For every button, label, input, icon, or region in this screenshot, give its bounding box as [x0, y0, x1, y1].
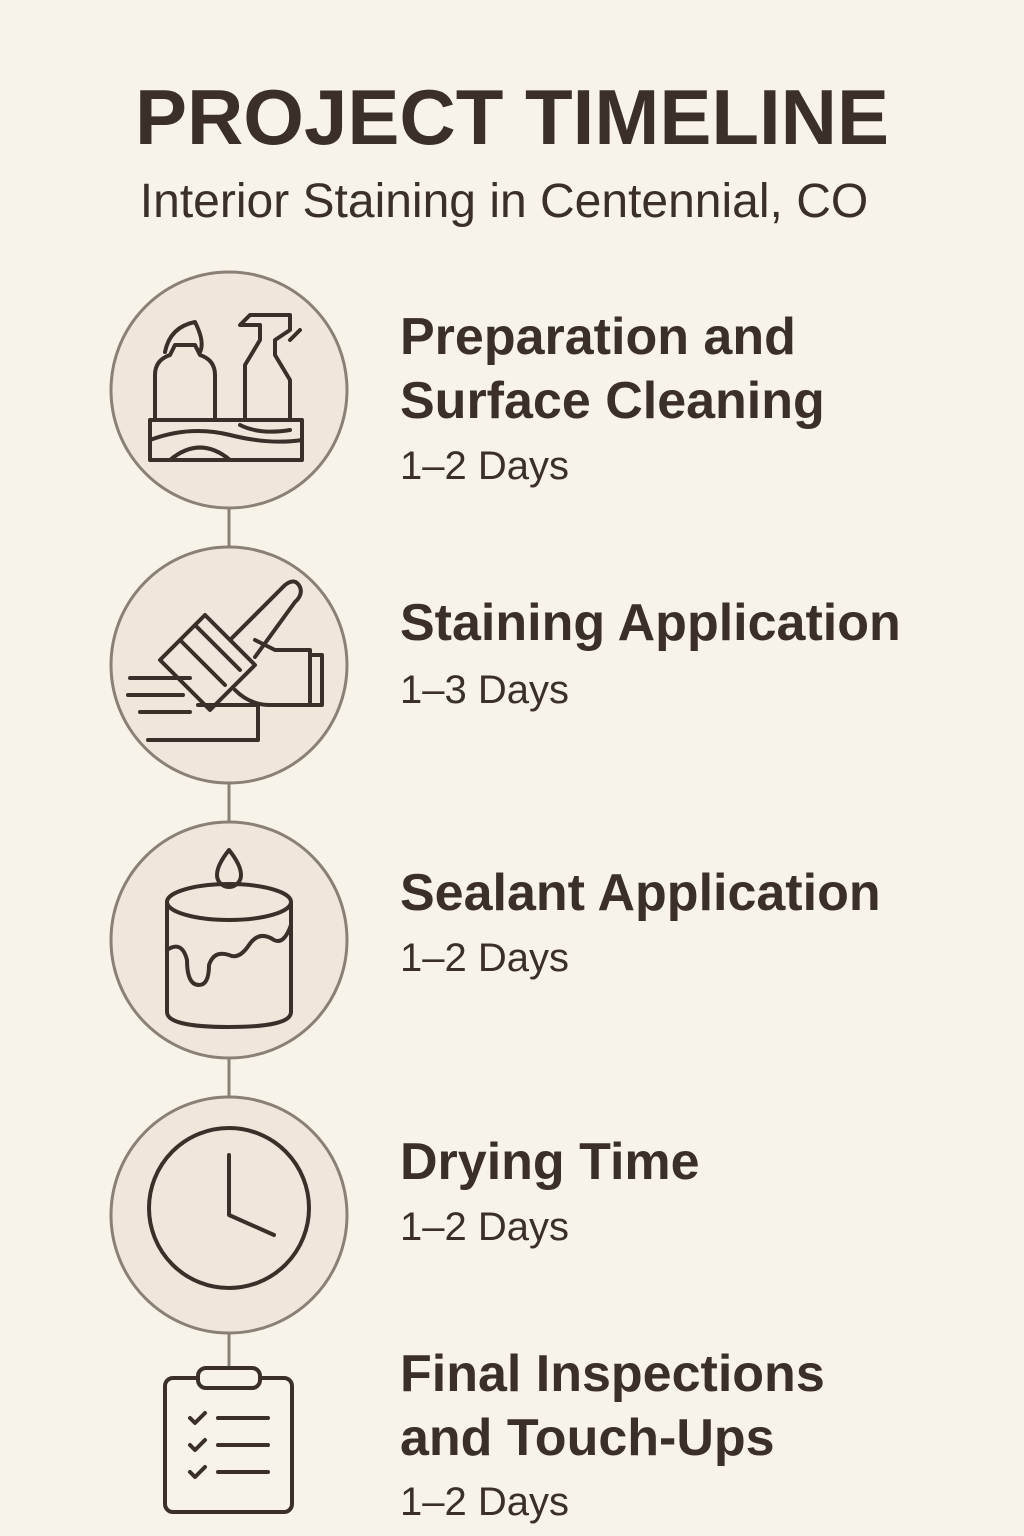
text: Staining Application	[400, 594, 901, 652]
icon: clipboard	[165, 1368, 292, 1512]
connectors	[228, 508, 230, 1368]
title: PROJECT TIMELINE	[135, 73, 889, 161]
text: Preparation and	[400, 308, 796, 366]
icon: cleaning supplies	[111, 272, 347, 508]
text: 1–2 Days	[400, 1205, 569, 1249]
step 3	[400, 864, 881, 980]
text: and Touch-Ups	[400, 1409, 775, 1467]
text: 1–2 Days	[400, 936, 569, 980]
text: 1–2 Days	[400, 1480, 569, 1524]
icon: clock	[111, 1097, 347, 1333]
text: Drying Time	[400, 1133, 700, 1191]
text: 1–3 Days	[400, 668, 569, 712]
icon: sealant can	[111, 822, 347, 1058]
text: Final Inspections	[400, 1345, 825, 1403]
icon: brush and hand	[111, 547, 347, 783]
text: Surface Cleaning	[400, 372, 825, 430]
text: 1–2 Days	[400, 444, 569, 488]
step 5	[400, 1345, 825, 1524]
step 2	[400, 594, 901, 712]
subtitle: Interior Staining in Centennial, CO	[140, 175, 868, 228]
step 1	[400, 308, 825, 488]
text: Sealant Application	[400, 864, 881, 922]
step 4	[400, 1133, 700, 1249]
